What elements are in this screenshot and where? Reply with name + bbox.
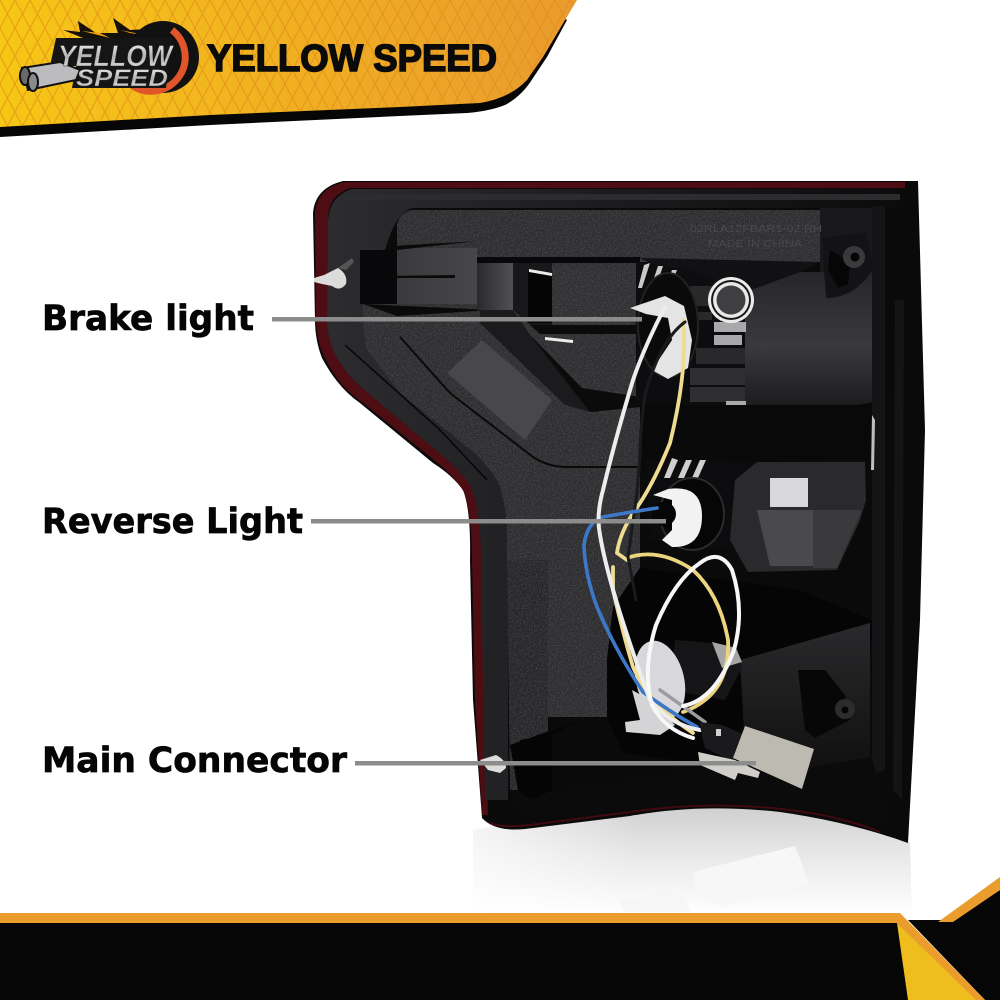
lower left textured strip — [507, 560, 548, 790]
stud stem — [338, 258, 354, 270]
logo wordmark: SPEED — [76, 65, 168, 92]
footer yellow wedge — [897, 923, 976, 1000]
textured back panel — [363, 210, 820, 717]
lower reflector glint — [712, 642, 742, 668]
raised lettering: 02RLA12FBAR1-92 RH — [690, 224, 822, 235]
footer orange stripe — [0, 913, 985, 1000]
channel shading — [530, 335, 640, 412]
smooth diagonal panel — [447, 340, 552, 440]
panel curved crease — [400, 337, 640, 467]
perimeter inner band — [327, 189, 905, 800]
main connector label: Main Connector — [42, 741, 348, 781]
diagonal channel — [480, 310, 640, 412]
band lines — [345, 345, 487, 480]
logo wordmark — [58, 40, 174, 92]
stepped recess — [477, 262, 513, 310]
upper chamber — [745, 272, 872, 406]
right upper shelf — [820, 208, 872, 272]
logo wordmark: YELLOW — [58, 40, 174, 73]
lower bulb disc — [627, 635, 693, 725]
right side rails — [872, 206, 904, 800]
bottom inner lip — [510, 757, 886, 820]
lower black pocket — [607, 568, 872, 770]
lower red edge — [490, 805, 880, 832]
bottom left stud — [480, 755, 506, 773]
brand name: YELLOW SPEED — [207, 38, 497, 80]
footer right orange stripe — [938, 877, 1000, 922]
smooth left recess — [397, 248, 477, 304]
red lens edge — [315, 182, 905, 815]
wiring harness — [584, 307, 739, 738]
brake light label: Brake light — [42, 299, 254, 339]
yellow wire one — [613, 320, 693, 733]
dark channel block — [513, 263, 552, 325]
floor reflection — [473, 806, 912, 915]
callout: brake light — [42, 299, 642, 339]
logo flame highlight — [82, 30, 150, 38]
main connector — [698, 722, 814, 789]
middle reflector — [645, 458, 866, 572]
logo exhaust pipes — [20, 62, 80, 91]
logo emblem — [20, 18, 199, 93]
block ledge — [530, 325, 643, 334]
right top mount — [822, 232, 874, 298]
left mounting tab — [360, 250, 397, 304]
recess top rail — [477, 257, 640, 263]
lower chamber — [740, 623, 870, 775]
recess dark square — [528, 272, 552, 323]
lower bulb reflector — [670, 640, 742, 700]
logo ring — [127, 21, 199, 93]
callout: main connector — [42, 741, 756, 781]
banner shadow — [0, 15, 567, 137]
footer black base — [0, 923, 977, 1000]
brake light leader line — [272, 317, 642, 322]
blue wire — [584, 508, 697, 727]
header banner — [0, 0, 577, 137]
logo flames — [63, 18, 197, 50]
black wire — [628, 322, 685, 600]
reverse light leader line — [311, 519, 666, 524]
block highlights — [529, 269, 573, 343]
footer right black — [908, 890, 1000, 1000]
mid divider — [640, 405, 872, 465]
upper dark hood — [640, 258, 820, 292]
reverse light label: Reverse Light — [42, 502, 303, 542]
upper bulb socket — [630, 273, 698, 379]
upper sensor ring — [708, 277, 754, 323]
white wire loop — [648, 557, 739, 738]
callout: reverse light — [42, 502, 666, 542]
white wire one — [599, 307, 700, 730]
stud left top — [314, 268, 346, 289]
upper reflector cells — [636, 262, 746, 405]
logo plate — [50, 38, 172, 88]
lamp outer housing — [313, 181, 925, 843]
lower clip — [625, 690, 675, 735]
bottom left mount — [510, 720, 580, 800]
footer band — [0, 877, 1000, 1000]
grey wire — [660, 690, 705, 722]
middle bulb socket — [652, 478, 724, 550]
main connector leader line — [355, 761, 756, 766]
tail light assembly: MADE IN CHINA — [708, 239, 802, 250]
banner diamond pattern — [0, 0, 577, 127]
right highlight — [871, 415, 875, 470]
lower textured inset — [573, 342, 640, 398]
upper textured inset — [553, 270, 630, 325]
top band sheen — [345, 194, 900, 200]
tail light assembly — [313, 181, 925, 843]
yellow wire two — [630, 554, 728, 712]
lower right mount — [798, 670, 855, 738]
tab ribs — [363, 241, 493, 316]
banner fill — [0, 0, 577, 127]
